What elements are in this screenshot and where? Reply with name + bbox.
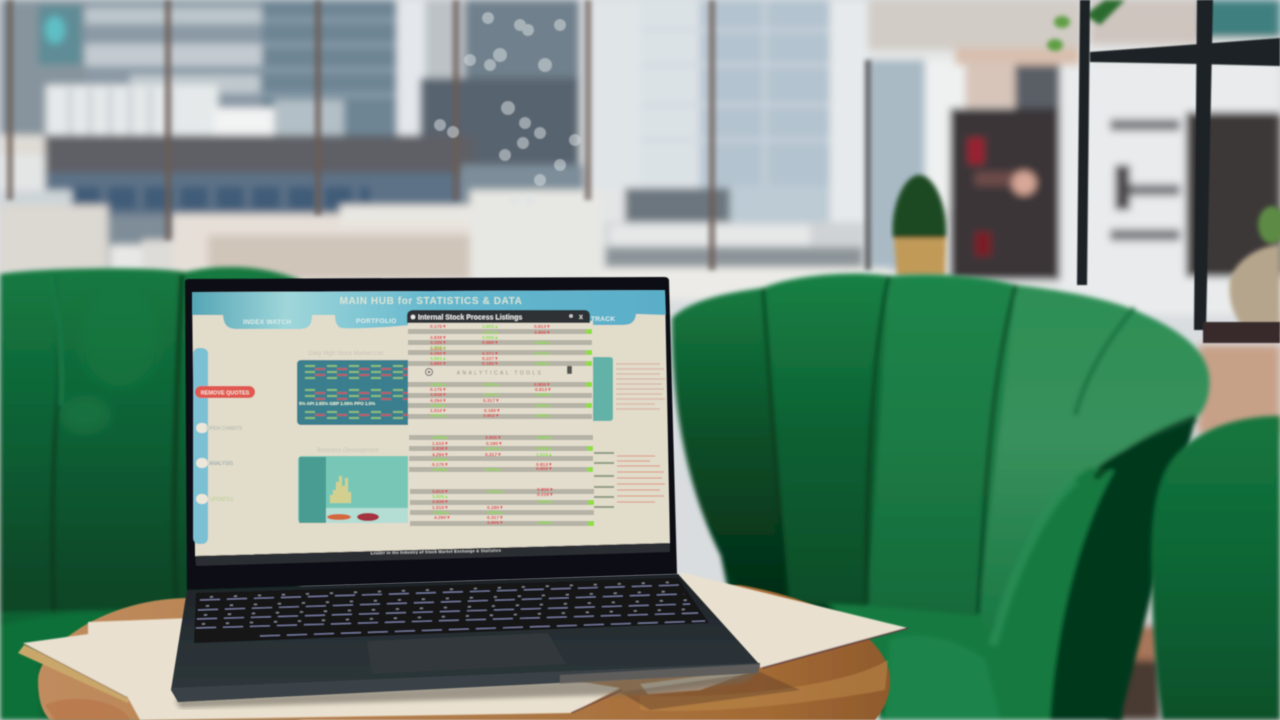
green values: 1.515▲ xyxy=(483,392,500,398)
red values: 4.294▼ xyxy=(432,452,449,458)
laptop screen: REMOVE QUOTES xyxy=(201,390,250,396)
red values: 0.180▼ xyxy=(486,441,503,447)
red values xyxy=(430,324,554,526)
green values: 3.805▲ xyxy=(430,403,447,409)
red values: 3.205▼ xyxy=(430,346,447,352)
tab labels: PORTFOLIO xyxy=(356,318,397,325)
red values: 0.800▼ xyxy=(536,466,553,472)
red values: 3.802▼ xyxy=(483,413,500,419)
red values: 3.805▼ xyxy=(485,435,502,441)
red values: 3.838▼ xyxy=(430,335,447,341)
section headings: Daily High Stock Market List xyxy=(308,351,383,357)
tab labels xyxy=(243,316,615,326)
tab labels: TRACK xyxy=(591,316,615,323)
red values: 3.805▼ xyxy=(487,520,504,526)
green values: 4.290▲ xyxy=(430,345,447,351)
red values: 1.510▼ xyxy=(432,505,449,511)
side menu items: OPEN CHARTS xyxy=(206,426,243,432)
armchair seat xyxy=(820,600,1040,720)
footer strip xyxy=(195,543,670,566)
laptop screen: Leader in the Industry of Stock Market Exchange & Statistics xyxy=(371,548,501,555)
back panel two xyxy=(763,274,889,606)
red values: 0.317▼ xyxy=(485,452,502,458)
section headings xyxy=(308,351,383,454)
side menu items: UPDATES xyxy=(210,497,234,503)
green values xyxy=(430,324,554,526)
green values: 3.805▲ xyxy=(536,446,553,452)
green velvet chair, foreground right xyxy=(1151,416,1280,720)
red values: 0.180▼ xyxy=(482,361,499,367)
red values: 0.980▼ xyxy=(482,340,499,346)
red values: 0.813▼ xyxy=(534,324,551,330)
red values: 0.371▼ xyxy=(482,351,499,357)
red values: 4.294▼ xyxy=(430,398,447,404)
green values: 1.515▲ xyxy=(536,452,553,458)
armchair arm outer shadow xyxy=(1040,415,1198,720)
metal shelving with plant and vase xyxy=(1047,0,1280,343)
row end markers xyxy=(586,329,594,526)
screen title: MAIN HUB for STATISTICS & DATA xyxy=(340,296,522,307)
red values: 0.317▼ xyxy=(483,398,500,404)
green values: 3.805▲ xyxy=(534,361,551,367)
chair seams xyxy=(763,276,1016,614)
section headings: Business Development xyxy=(317,448,379,454)
armchair dark underlayer xyxy=(672,300,1195,720)
red values: 3.838▼ xyxy=(432,499,449,505)
red values: 0.813▼ xyxy=(535,387,552,393)
green values: 3.805▲ xyxy=(430,382,447,388)
arm front highlight xyxy=(989,468,1115,720)
tab labels: INDEX WATCH xyxy=(243,319,291,326)
red values: 0.215▼ xyxy=(537,492,554,498)
laptop base and keyboard deck xyxy=(171,574,760,702)
red values: 0.175▼ xyxy=(432,462,449,468)
red values: 0.175▼ xyxy=(430,324,447,330)
side menu items: ANALYSIS xyxy=(209,461,234,467)
red values: 3.880▼ xyxy=(430,361,447,367)
green values: 1.515▲ xyxy=(482,330,499,336)
green values: 3.880▲ xyxy=(536,435,553,441)
laptop screen xyxy=(192,290,670,566)
green values: 3.805▲ xyxy=(537,499,554,505)
red values: 4.290▼ xyxy=(430,351,447,357)
red values: 3.205▼ xyxy=(430,340,447,346)
popup window: Internal Stock Process Listings xyxy=(407,310,594,526)
back panel one xyxy=(672,288,788,602)
popup window: Internal Stock Process Listings: Internal Stock Process Listings xyxy=(418,314,522,322)
green values: 3.005▲ xyxy=(432,494,449,500)
laptop shadow on the papers xyxy=(175,670,760,708)
red values: 3.838▼ xyxy=(432,446,449,452)
side menu bar xyxy=(193,348,208,544)
green velvet sofa, left xyxy=(0,267,300,720)
popup window: Internal Stock Process Listings: x xyxy=(579,314,583,321)
red button xyxy=(195,386,255,398)
red values: 1.510▼ xyxy=(430,408,447,414)
green values: 3.805▲ xyxy=(433,510,450,516)
red values: 3.838▼ xyxy=(430,392,447,398)
teal stock table panel: 5% API 2.65% GBP 1.06% PPO 1.0% xyxy=(299,401,375,406)
analytical tools strip xyxy=(426,368,432,376)
stack of papers under the laptop xyxy=(18,572,908,720)
green values: 1.515▲ xyxy=(485,446,502,452)
red values: 1.510▼ xyxy=(432,441,449,447)
red values: 0.800▼ xyxy=(534,382,551,388)
red values: 3.805▼ xyxy=(534,330,551,336)
bokeh lights on the dark building xyxy=(434,12,581,206)
red values: 0.227▼ xyxy=(482,356,499,362)
right list fragment xyxy=(594,453,614,507)
screen bezel xyxy=(185,277,677,590)
red values: 0.813▼ xyxy=(536,462,553,468)
red values: 0.180▼ xyxy=(487,505,504,511)
red values: 0.175▼ xyxy=(430,387,447,393)
green values: 3.880▲ xyxy=(537,520,554,526)
green values: 3.805▲ xyxy=(430,413,447,419)
right teal panel xyxy=(590,357,613,421)
green values: 3.880▲ xyxy=(535,413,552,419)
screen header bar xyxy=(192,290,666,329)
red values: 3.810▼ xyxy=(432,489,449,495)
keyboard xyxy=(194,578,709,643)
right text block, upper xyxy=(616,364,665,409)
green values: 1.515▲ xyxy=(487,489,504,495)
laptop xyxy=(171,277,760,708)
green velvet armchair, right xyxy=(672,274,1209,720)
red values: 0.317▼ xyxy=(487,515,504,521)
grey table rows xyxy=(408,329,594,526)
side menu items xyxy=(196,423,243,504)
green values: 0.375▲ xyxy=(534,351,551,357)
red values: 0.180▼ xyxy=(484,408,501,414)
green values: 3.880▲ xyxy=(432,467,449,473)
teal dashboard chart panel xyxy=(298,456,413,523)
trackpad xyxy=(367,633,566,674)
green values: 3.838▲ xyxy=(534,340,551,346)
green values: 3.881▲ xyxy=(430,356,447,362)
back panel four xyxy=(978,285,1209,630)
back panel three xyxy=(867,274,1016,616)
round wooden table xyxy=(38,585,890,720)
green values: 3.005▲ xyxy=(482,335,499,341)
green values: 3.805▲ xyxy=(487,510,504,516)
green values: 3.838▲ xyxy=(535,392,552,398)
green values: 3.880▲ xyxy=(432,457,449,463)
red values: 0.800▼ xyxy=(537,487,554,493)
red values: 4.290▼ xyxy=(434,515,451,521)
green values: 3.805▲ xyxy=(482,324,499,330)
plant in a yellow pot xyxy=(893,175,946,276)
green values: 3.805▲ xyxy=(432,435,449,441)
teal stock table panel xyxy=(297,360,417,425)
green values: 3.805▲ xyxy=(535,403,552,409)
green values: 3.005▲ xyxy=(485,467,502,473)
green values: 1.515▲ xyxy=(483,382,500,388)
popup window: Internal Stock Process Listings: ANALYTICAL TOOLS xyxy=(457,370,543,376)
right text block, lower xyxy=(617,456,665,502)
window frames and dark window mullions xyxy=(10,0,868,270)
